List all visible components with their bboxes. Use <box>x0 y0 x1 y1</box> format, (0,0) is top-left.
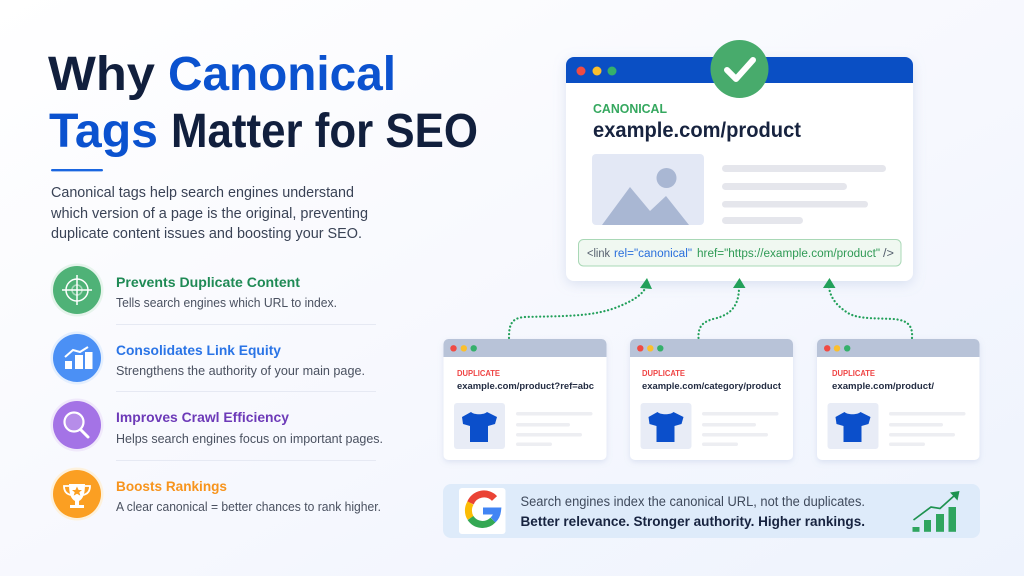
arrow: duplicate 1 to canonical <box>509 278 652 338</box>
text placeholder lines <box>516 412 592 446</box>
benefit heading: Consolidates Link Equity <box>116 342 281 358</box>
callout emphasis: Better relevance. Stronger authority. Higher rankings. <box>520 513 865 529</box>
icon: google G <box>459 488 506 534</box>
benefit heading: Improves Crawl Efficiency <box>116 409 289 425</box>
thumbnail: t-shirt <box>454 403 505 449</box>
thumbnail: t-shirt <box>640 403 692 449</box>
thumbnail: t-shirt <box>828 403 878 449</box>
duplicate url: example.com/category/product <box>642 381 782 392</box>
window dots <box>637 345 664 351</box>
panel: duplicate page 1 <box>444 339 606 460</box>
title bar <box>817 339 980 357</box>
code snippet: <link <box>587 248 610 260</box>
canonical url: example.com/product <box>593 119 801 142</box>
image placeholder <box>592 154 704 225</box>
window title bar <box>566 57 913 83</box>
code snippet: rel="canonical" <box>614 248 692 260</box>
title bar <box>630 339 793 357</box>
window dots <box>576 66 616 76</box>
icon: green check <box>710 40 768 98</box>
intro text: which version of a page is the original, preventing <box>50 206 368 222</box>
window dots <box>824 345 850 351</box>
benefit description: A clear canonical = better chances to rank higher. <box>116 500 381 514</box>
title: Why <box>48 48 155 101</box>
icon: target <box>50 264 104 316</box>
icon: growth chart <box>912 491 960 532</box>
duplicate label: DUPLICATE <box>642 369 686 378</box>
arrow: duplicate 2 to canonical <box>698 278 746 338</box>
title: Tags <box>49 105 158 158</box>
duplicate label: DUPLICATE <box>457 369 501 378</box>
icon: trophy <box>50 468 104 520</box>
code snippet <box>578 240 901 266</box>
benefit: improves crawl efficiency <box>50 398 383 452</box>
panel: canonical page window <box>566 40 913 281</box>
benefit: prevents duplicate content <box>50 264 337 316</box>
window dots <box>450 345 477 351</box>
callout text: Search engines index the canonical URL, not the duplicates. <box>520 494 865 509</box>
arrow: duplicate 3 to canonical <box>823 278 912 338</box>
panel: search engine callout <box>443 484 980 538</box>
benefit: boosts rankings <box>50 468 381 520</box>
title bar <box>444 339 606 357</box>
text placeholder lines <box>702 412 778 446</box>
code snippet: /> <box>883 248 894 260</box>
benefit heading: Boosts Rankings <box>116 478 227 494</box>
intro text: Canonical tags help search engines understand <box>51 185 354 201</box>
benefit heading: Prevents Duplicate Content <box>116 274 300 290</box>
icon: magnifier <box>50 398 104 452</box>
title underline <box>51 169 103 171</box>
benefit description: Strengthens the authority of your main page. <box>116 364 365 378</box>
duplicate url: example.com/product/ <box>832 381 934 392</box>
icon: bar chart <box>50 332 104 384</box>
panel: duplicate page 3 <box>817 339 980 460</box>
canonical label: CANONICAL <box>593 102 667 116</box>
benefit description: Tells search engines which URL to index. <box>116 296 337 310</box>
title: Canonical <box>168 48 396 101</box>
duplicate label: DUPLICATE <box>832 369 876 378</box>
code snippet: href="https://example.com/product" <box>697 248 880 260</box>
title: Matter for SEO <box>171 105 478 158</box>
duplicate url: example.com/product?ref=abc <box>457 381 594 392</box>
text placeholder lines <box>889 412 966 446</box>
text placeholder lines <box>722 165 886 224</box>
title <box>48 48 478 158</box>
intro text <box>50 185 368 242</box>
benefit description: Helps search engines focus on important pages. <box>116 432 383 446</box>
panel: duplicate page 2 <box>630 339 793 460</box>
intro text: duplicate content issues and boosting your SEO. <box>51 226 362 242</box>
benefit: consolidates link equity <box>50 332 365 384</box>
